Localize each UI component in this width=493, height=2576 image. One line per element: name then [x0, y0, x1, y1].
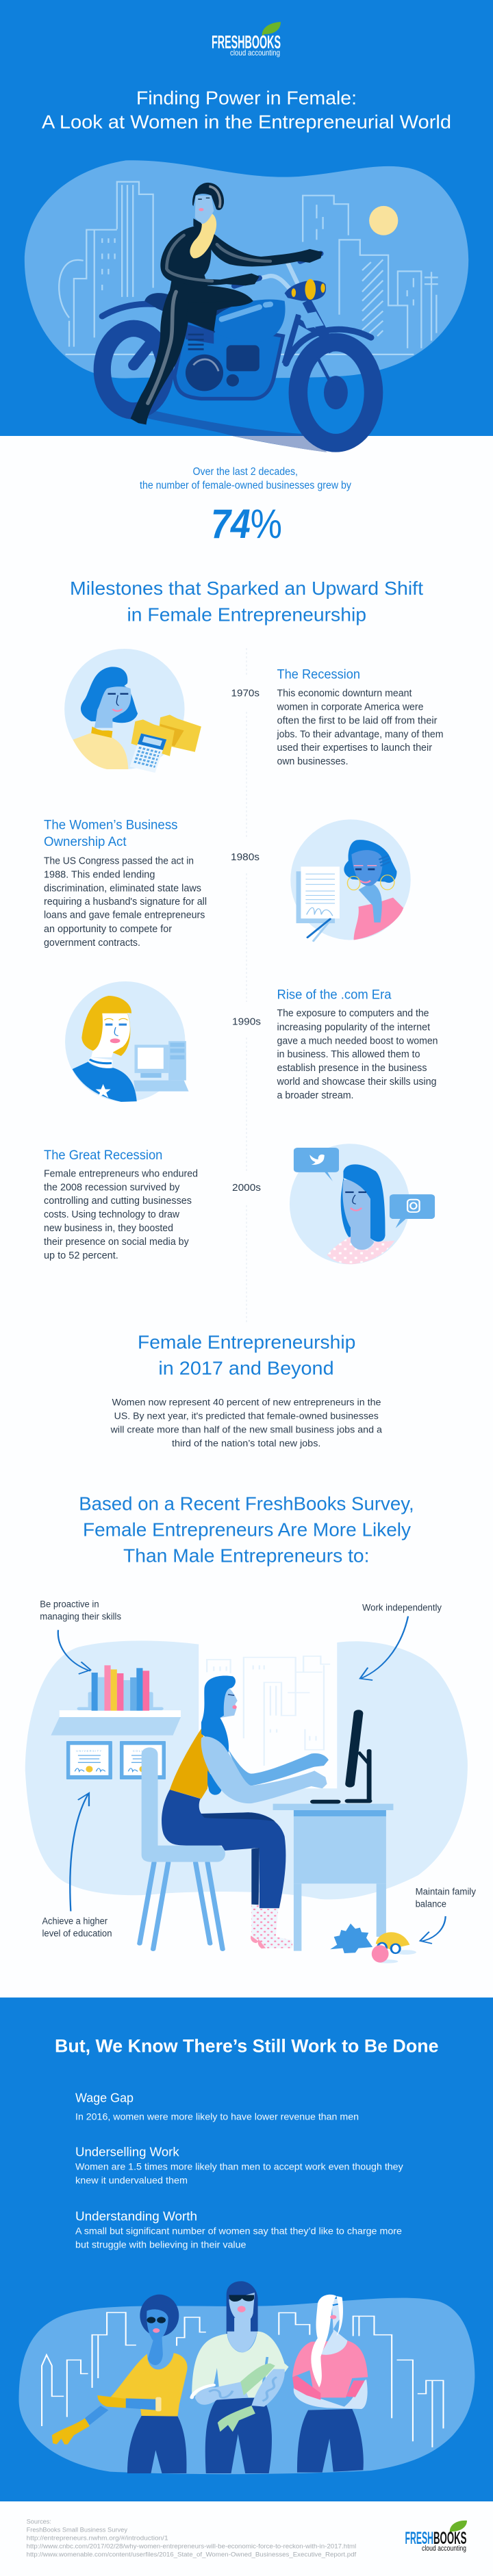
text: Rise of the .com Era: a broader stream. [277, 1090, 353, 1101]
text: Rise of the .com Era: in business. This allowed them to [277, 1048, 420, 1060]
item: wage gap: Wage Gap [75, 2091, 134, 2105]
illustration: three women with skyline [19, 2281, 475, 2474]
label: achieve education: level of education [42, 1928, 112, 1938]
panel: still work to be done [0, 1998, 493, 2501]
text: The Recession: women in corporate America were [277, 701, 423, 713]
text: sources: Sources: [27, 2519, 51, 2525]
rider [131, 183, 323, 424]
body text [110, 1398, 383, 1449]
text: The Great Recession: up to 52 percent. [44, 1250, 118, 1261]
heading: survey: Than Male Entrepreneurs to: [123, 1545, 370, 1567]
text: The Recession: jobs. To their advantage, many of them [277, 728, 444, 740]
text: The Great Recession: Female entrepreneurs who endured [44, 1168, 198, 1179]
year: 1990s [232, 1016, 261, 1028]
panel: hero header [0, 0, 493, 452]
woman: pink shirt [292, 2295, 368, 2473]
background blob [19, 2298, 475, 2474]
woman: yellow shirt [52, 2295, 188, 2473]
illustration: woman with folders and calculator [64, 649, 201, 773]
text: sources: http://www.womenable.com/content/userfiles/2016_State_of_Women-Owned_Businesses_Executive_Report.pdf [27, 2551, 357, 2558]
logo: FreshBooks top: cloud accounting [230, 48, 280, 57]
heading: survey [79, 1493, 414, 1567]
text: The Great Recession: costs. Using technology to draw [44, 1209, 179, 1220]
item: underselling work [75, 2145, 403, 2186]
title [42, 88, 451, 133]
label: family balance [416, 1886, 476, 1909]
arrow: family [420, 1916, 446, 1944]
woman: green shirt [192, 2281, 289, 2473]
heading: milestones [70, 578, 423, 625]
panel: 2000s milestone [44, 1144, 435, 1264]
text: The Women's Business Ownership Act: 1988. This ended lending [44, 869, 155, 880]
text: The Women's Business Ownership Act: The Women’s Business [44, 818, 178, 833]
label: achieve education [42, 1916, 112, 1938]
shelf with books [51, 1665, 181, 1736]
text: Rise of the .com Era: The exposure to computers and the [277, 1007, 429, 1019]
label: be proactive: managing their skills [40, 1611, 121, 1621]
arrow: education [70, 1793, 89, 1911]
item: underselling work: Women are 1.5 times more likely than men to accept work even though they [75, 2161, 403, 2172]
chair [140, 1747, 225, 1949]
heading: But, We Know There’s Still Work to Be Done [55, 2036, 438, 2057]
text: The Women's Business Ownership Act: The US Congress passed the act in [44, 855, 194, 867]
diplomas: UNIVERSITY [76, 1750, 103, 1752]
logo: FreshBooks top: FRESHBOOKS [212, 31, 281, 52]
text: sources [27, 2519, 357, 2558]
toys [330, 1924, 416, 1963]
stat: 74 percent growth [140, 466, 351, 547]
illustration: woman on motorcycle with skyline [25, 160, 468, 452]
stat: 74 percent growth: the number of female-owned businesses grew by [140, 480, 351, 491]
icon: twitter bubble [294, 1148, 339, 1181]
logo: FreshBooks footer: FRESH [405, 2529, 433, 2548]
text: The Great Recession: their presence on social media by [44, 1236, 189, 1248]
icon: instagram bubble [390, 1194, 435, 1228]
text: sources: http://entrepreneurs.nwhm.org/#/introduction/1 [27, 2535, 168, 2542]
computer [313, 1713, 370, 1802]
window skyline [207, 1656, 330, 1766]
background blob [25, 160, 468, 378]
item: underselling work: Underselling Work [75, 2145, 179, 2159]
label: be proactive: Be proactive in [40, 1599, 99, 1609]
stat: 74 percent growth: 74% [211, 501, 282, 547]
heading: in 2017 and Beyond [158, 1358, 334, 1379]
body text: Women now represent 40 percent of new entrepreneurs in the [112, 1398, 381, 1408]
text: Rise of the .com Era: Rise of the .com Era [277, 988, 392, 1003]
text: The Recession: The Recession [277, 667, 360, 682]
year: 2000s [232, 1182, 261, 1194]
text: The Recession: often the first to be laid off from their [277, 714, 437, 726]
text: The Women's Business Ownership Act: government contracts. [44, 937, 140, 949]
text: The Women's Business Ownership Act: Ownership Act [44, 834, 127, 849]
woman typing [162, 1676, 329, 1948]
text: The Recession [277, 667, 444, 767]
text: The Women's Business Ownership Act [44, 818, 207, 949]
illustration: woman with signed document [290, 819, 411, 942]
text: The Recession: own businesses. [277, 756, 348, 767]
body text: US. By next year, it's predicted that female-owned businesses [114, 1411, 379, 1421]
diplomas [66, 1741, 166, 1779]
text: Rise of the .com Era [277, 988, 438, 1101]
body text: third of the nation’s total new jobs. [172, 1439, 320, 1449]
item: understanding worth: Understanding Worth [75, 2209, 197, 2224]
text: Rise of the .com Era: world and showcase their skills using [277, 1076, 437, 1087]
arrow: independence [360, 1617, 408, 1680]
text: The Women's Business Ownership Act: an opportunity to compete for [44, 923, 172, 935]
text: The Women's Business Ownership Act: loans and gave female entrepreneurs [44, 910, 205, 921]
desk [273, 1804, 393, 1951]
item: understanding worth: A small but significant number of women say that they’d like to charge more [75, 2226, 402, 2237]
text: The Recession: This economic downturn meant [277, 688, 412, 699]
body text: will create more than half of the new small business jobs and a [110, 1425, 383, 1435]
arrow: skills [58, 1630, 90, 1674]
logo: FreshBooks top [212, 22, 281, 57]
item: wage gap: In 2016, women were more likely to have lower revenue than men [75, 2111, 359, 2122]
skyline [59, 182, 438, 355]
text: Rise of the .com Era: establish presence in the business [277, 1062, 427, 1074]
heading: milestones: Milestones that Sparked an Upward Shift [70, 578, 423, 599]
heading: milestones: in Female Entrepreneurship [127, 604, 366, 625]
item: underselling work: knew it undervalued them [75, 2175, 188, 2186]
item: understanding worth: but struggle with believing in their value [75, 2239, 246, 2250]
ground shadow [143, 409, 327, 452]
title: Finding Power in Female: [136, 88, 357, 109]
title: A Look at Women in the Entrepreneurial World [42, 111, 451, 133]
logo: FreshBooks footer: cloud accounting [422, 2545, 466, 2553]
item: wage gap [75, 2091, 359, 2122]
text: sources: FreshBooks Small Business Survey [27, 2527, 128, 2534]
text: The Great Recession: The Great Recession [44, 1148, 162, 1163]
text: The Great Recession: controlling and cutting businesses [44, 1195, 192, 1207]
logo: FreshBooks footer [405, 2521, 467, 2553]
text: The Great Recession: new business in, they boosted [44, 1222, 173, 1234]
item: understanding worth [75, 2209, 402, 2250]
label: be proactive [40, 1599, 121, 1621]
text: The Women's Business Ownership Act: discrimination, eliminated state laws [44, 882, 201, 894]
heading: survey: Female Entrepreneurs Are More Likely [83, 1519, 411, 1541]
year: 1970s [231, 688, 260, 699]
heading [138, 1332, 355, 1379]
illustration: woman with desktop computer [65, 981, 189, 1102]
panel: 1990s milestone [65, 981, 438, 1102]
panel: 1970s milestone [64, 649, 444, 773]
text: Rise of the .com Era: gave a much needed boost to women [277, 1035, 438, 1046]
text: The Women's Business Ownership Act: requiring a husband's signature for all [44, 896, 207, 907]
year: 1980s [231, 851, 260, 863]
sun [369, 206, 398, 235]
room blob [25, 1640, 468, 1899]
stat: 74 percent growth: Over the last 2 decades, [193, 466, 298, 478]
label: work independently: Work independently [362, 1602, 442, 1612]
section: 2017 and beyond [110, 1332, 383, 1449]
diplomas: COLLEGE [133, 1750, 153, 1752]
text: The Great Recession: the 2008 recession survived by [44, 1181, 180, 1193]
text: The Recession: used their expertises to launch their [277, 742, 432, 754]
panel: 1980s milestone [44, 818, 411, 949]
motorcycle [102, 254, 374, 443]
heading: survey: Based on a Recent FreshBooks Survey, [79, 1493, 414, 1515]
illustration: woman at desk [25, 1617, 468, 1963]
label: family balance: Maintain family [416, 1886, 476, 1896]
skyline [42, 2313, 443, 2447]
text: sources: http://www.cnbc.com/2017/02/28/why-women-entrepreneurs-will-be-economic-force-to-reckon-with-in-2017.html [27, 2543, 356, 2550]
illustration: woman with social media bubbles [290, 1144, 435, 1264]
heading: Female Entrepreneurship [138, 1332, 355, 1353]
label: family balance: balance [416, 1898, 446, 1909]
text: Rise of the .com Era: increasing popularity of the internet [277, 1021, 431, 1033]
text: The Great Recession [44, 1148, 198, 1261]
label: achieve education: Achieve a higher [42, 1916, 108, 1926]
